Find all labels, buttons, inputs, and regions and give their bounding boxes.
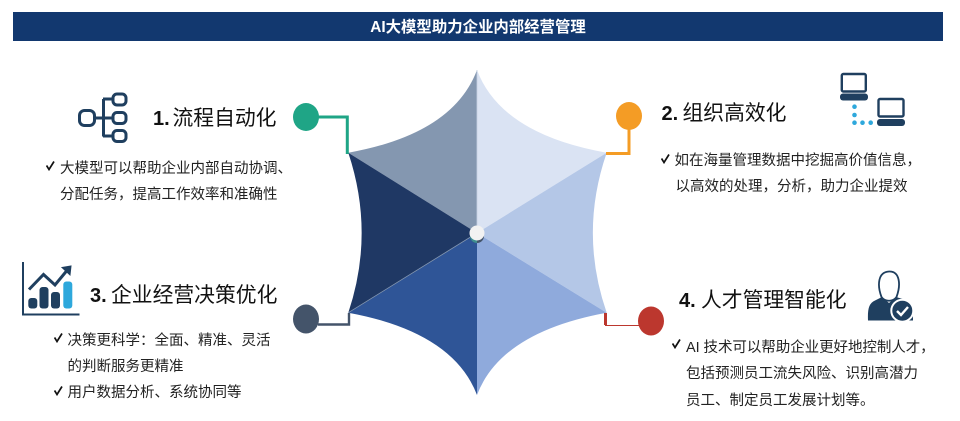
text block 3: 用户数据分析、系统协同等 (68, 385, 242, 401)
heading 3: 企业经营决策优化 (111, 284, 277, 307)
text block 4: AI 技术可以帮助企业更好地控制人才， (686, 340, 935, 356)
heading 2: 组织高效化 (682, 102, 786, 125)
title bar (13, 12, 943, 41)
text block 3: 的判断服务更精准 (68, 359, 184, 375)
text block 2 (661, 152, 921, 194)
text block 2: 如在海量管理数据中挖掘高价值信息， (674, 152, 921, 168)
heading 2: 2. (662, 103, 678, 125)
text block 4 (672, 339, 935, 408)
text block 1: 分配任务，提高工作效率和准确性 (60, 186, 278, 202)
heading 1: 流程自动化 (172, 107, 276, 130)
text block 1: 大模型可以帮助企业内部自动协调、 (60, 160, 292, 176)
text block 1 (46, 160, 292, 202)
text block 4: 包括预测员工流失风险、识别高潜力 (686, 366, 918, 382)
text block 2: 以高效的处理，分析，助力企业提效 (676, 178, 908, 194)
text block 4: 员工、制定员工发展计划等。 (686, 392, 874, 408)
heading 3: 3. (90, 285, 107, 307)
heading 1: 1. (153, 108, 170, 130)
heading 4: 4. (679, 290, 696, 312)
heading 4: 人才管理智能化 (701, 289, 847, 312)
title bar: AI大模型助力企业内部经营管理 (370, 19, 586, 36)
text block 3 (54, 332, 270, 401)
text block 3: 决策更科学：全面、精准、灵活 (68, 333, 270, 349)
